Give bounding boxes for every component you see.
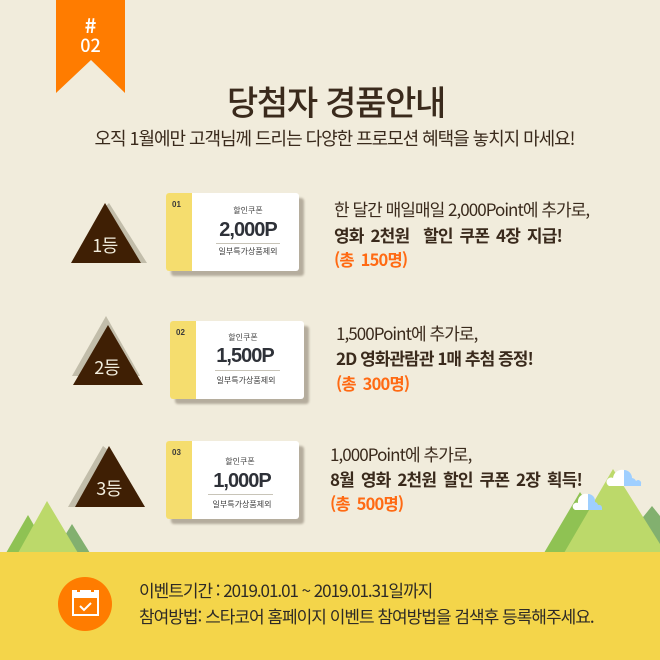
ribbon badge: 02 bbox=[80, 32, 101, 58]
first prize text: 한 달간 매일매일 2,000Point에 추가로, bbox=[334, 196, 589, 221]
coupon: 2,000P bbox=[166, 193, 299, 271]
second prize text bbox=[336, 320, 533, 395]
icon: third place triangle: 3등 bbox=[96, 475, 122, 501]
footer band bbox=[0, 552, 660, 660]
subtitle: 오직 1월에만 고객님께 드리는 다양한 프로모션 혜택을 놓치지 마세요! bbox=[95, 125, 574, 151]
coupon: 1,500P: 할인쿠폰 bbox=[228, 332, 258, 343]
coupon: 1,500P: 02 bbox=[176, 328, 185, 337]
coupon: 1,000P: 03 bbox=[172, 448, 181, 457]
icon: calendar bbox=[58, 577, 112, 631]
title: 당첨자 경품안내 bbox=[227, 76, 445, 125]
first prize text: (총 150명) bbox=[334, 247, 407, 271]
third prize text bbox=[330, 441, 582, 515]
coupon: 1,000P: 할인쿠폰 bbox=[225, 456, 255, 467]
first prize text bbox=[334, 196, 590, 271]
second prize text: 1,500Point에 추가로, bbox=[336, 320, 477, 345]
right mountains with clouds bbox=[544, 469, 660, 552]
left mountains bbox=[6, 501, 90, 552]
icon: third place triangle bbox=[68, 446, 145, 507]
first prize text: 영화 2천원 할인 쿠폰 4장 지급! bbox=[334, 222, 562, 247]
icon: first place triangle bbox=[71, 203, 147, 263]
third prize text: (총 500명) bbox=[330, 491, 403, 515]
ribbon badge: # bbox=[85, 10, 96, 39]
ribbon badge bbox=[56, 0, 125, 93]
coupon: 2,000P: 일부특가상품제외 bbox=[219, 246, 277, 257]
coupon: 1,000P bbox=[166, 441, 299, 519]
coupon: 2,000P: 01 bbox=[172, 200, 181, 209]
icon: second place triangle: 2등 bbox=[94, 354, 120, 380]
coupon: 1,000P: 일부특가상품제외 bbox=[213, 499, 271, 510]
coupon: 1,500P: 일부특가상품제외 bbox=[217, 375, 275, 386]
event period: 이벤트기간 : 2019.01.01 ~ 2019.01.31일까지 bbox=[139, 577, 432, 602]
second prize text: 2D 영화관람관 1매 추첨 증정! bbox=[336, 345, 533, 370]
second prize text: (총 300명) bbox=[336, 371, 409, 395]
icon: first place triangle: 1등 bbox=[92, 232, 118, 258]
third prize text: 1,000Point에 추가로, bbox=[330, 441, 471, 466]
coupon: 2,000P: 할인쿠폰 bbox=[233, 205, 263, 216]
participation method: 참여방법: 스타코어 홈페이지 이벤트 참여방법을 검색후 등록해주세요. bbox=[139, 603, 594, 628]
icon: second place triangle bbox=[72, 316, 143, 385]
coupon: 1,500P bbox=[170, 321, 304, 399]
coupon: 1,000P: 1,000P bbox=[213, 470, 271, 492]
third prize text: 8월 영화 2천원 할인 쿠폰 2장 획득! bbox=[330, 466, 582, 491]
coupon: 1,500P: 1,500P bbox=[216, 345, 274, 367]
coupon: 2,000P: 2,000P bbox=[219, 219, 277, 241]
